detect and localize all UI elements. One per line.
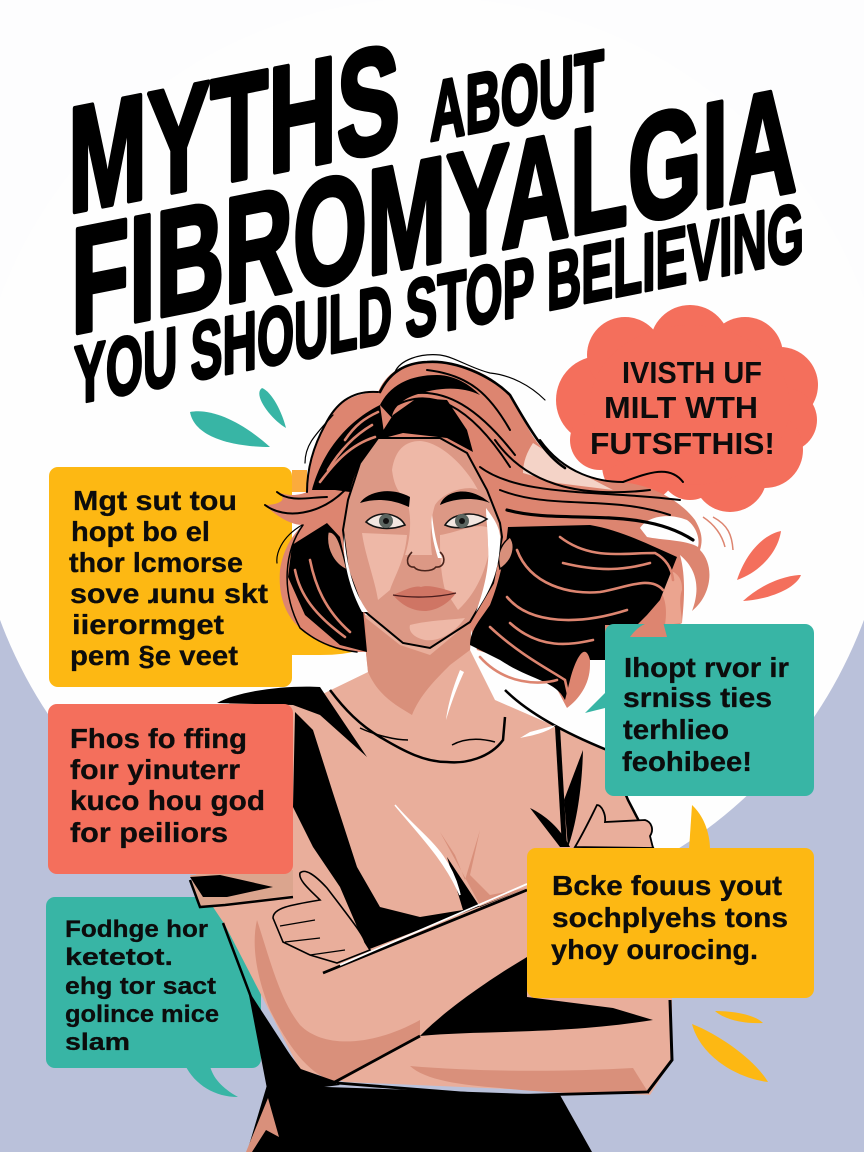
left sleeve (190, 870, 293, 907)
lips (393, 586, 456, 611)
body skin (195, 615, 672, 1095)
callout: coral box left: foır yinuterr (70, 754, 240, 785)
callout: coral cloud (556, 305, 818, 512)
callout: teal box bottom left: slam (65, 1029, 130, 1056)
callout: yellow box right: yhoy ourocing. (551, 934, 758, 965)
nose (408, 552, 444, 571)
icon: teal accent marks (190, 388, 286, 447)
icon: yellow accent marks (692, 1011, 768, 1082)
right strap and folds (555, 727, 567, 847)
callout: teal box bottom left (46, 897, 261, 1097)
callout: yellow box top left: iierormget (72, 609, 224, 640)
icon: coral accent marks (737, 531, 801, 601)
neck shadow (362, 615, 472, 715)
callout: teal box right: Ihopt rvor ir (624, 652, 789, 683)
hair strands (517, 550, 663, 593)
callout: coral box left (48, 704, 293, 874)
strap and neckline of top (293, 712, 527, 950)
callout: yellow box right (527, 805, 814, 998)
callout: coral box left: for peiliors (70, 817, 228, 848)
hair silhouette (265, 362, 709, 708)
callout: coral box left: Fhos fo ffing (70, 723, 247, 754)
callout: teal box bottom left: ketetot. (65, 944, 173, 971)
callout: teal box right: terhlieo (623, 714, 729, 745)
callout: coral cloud: FUTSFTHIS! (590, 426, 775, 461)
shoulder band (217, 687, 367, 757)
callout: yellow box top left: sove ɹunu skt (70, 578, 268, 609)
hair highlight (523, 443, 613, 490)
callout: coral cloud: IVISTH UF (622, 355, 762, 390)
forearm shadow (255, 920, 420, 1083)
black between arms (420, 957, 653, 1036)
callout: yellow box right: sochplyehs tons (552, 902, 788, 933)
ears (327, 532, 513, 570)
title line: about: ABOUT (430, 31, 604, 159)
eyebrows (360, 491, 490, 507)
callout: teal box bottom left: golince mice (65, 1001, 219, 1028)
face highlights (392, 441, 478, 555)
arm outlines (323, 890, 647, 1096)
callout: yellow box top left: pem §e veet (70, 640, 238, 671)
callout: yellow box top left (49, 467, 360, 687)
lower black top (247, 1085, 592, 1152)
lower hand on left arm (273, 871, 370, 963)
upper hand on right (575, 805, 653, 848)
callout: coral box left: kuco hou god (70, 785, 265, 816)
callout: teal box bottom left: Fodhge hor (65, 916, 208, 943)
callout: teal box bottom left: ehg tor sact (65, 973, 216, 1000)
face (343, 438, 502, 648)
callout: yellow box top left: hopt bo el (71, 516, 210, 547)
callout: yellow box top left: thor lcmorse (69, 547, 243, 578)
callout: yellow box right: Bcke fouus yout (552, 870, 782, 901)
hair wisps (703, 517, 733, 550)
illustration: woman with crossed arms (190, 355, 733, 1152)
callout: teal box right: srniss ties (623, 682, 772, 713)
callout: coral cloud: MILT WTH (604, 390, 758, 425)
eyes (366, 514, 487, 528)
callout: yellow box top left: Mgt sut tou (73, 485, 237, 516)
hair black masses (470, 525, 677, 700)
callout: teal box right: feohibee! (622, 746, 752, 777)
callout: teal box right (585, 616, 814, 796)
title (68, 13, 804, 422)
